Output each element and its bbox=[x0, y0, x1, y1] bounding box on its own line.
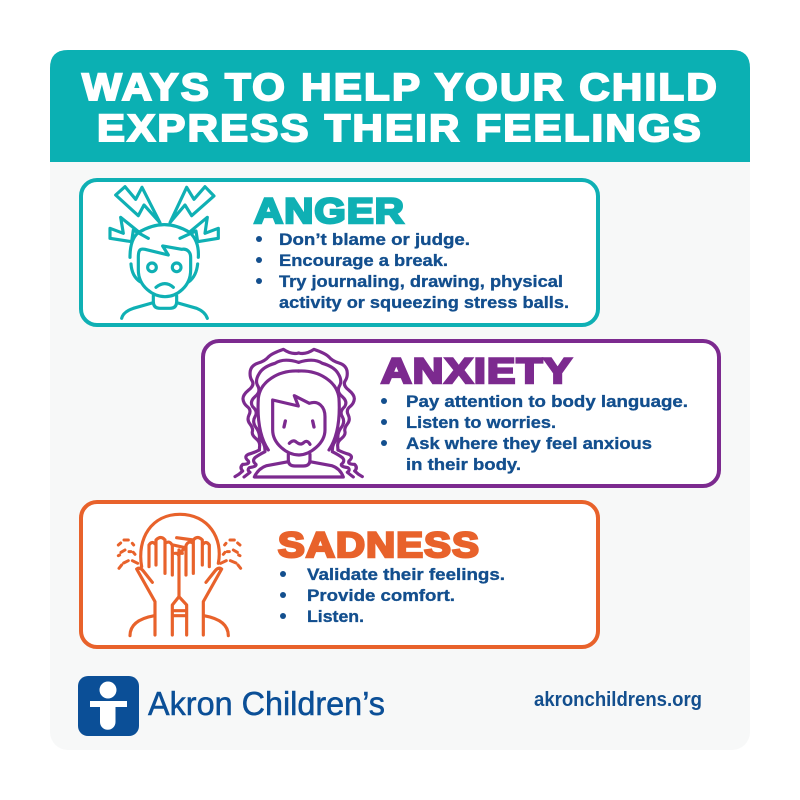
bullet list: anxiety: in their body. bbox=[406, 455, 521, 474]
heading: sadness: SADNESS bbox=[278, 526, 480, 565]
icon: crying child covering face bbox=[118, 514, 241, 636]
bullet list: anger: Don’t blame or judge. bbox=[279, 230, 470, 249]
icon: logo mark bbox=[78, 676, 139, 736]
logo: Akron Children's bbox=[78, 676, 385, 736]
panel: anxiety bbox=[203, 341, 719, 486]
panel: sadness bbox=[81, 502, 598, 647]
title banner bbox=[50, 50, 750, 162]
bullet list: sadness: Validate their feelings. bbox=[307, 565, 505, 584]
bullet list: anxiety: Ask where they feel anxious bbox=[406, 434, 652, 453]
icon: anxious child with wavy hair bbox=[235, 349, 362, 477]
bullet list: sadness: Provide comfort. bbox=[307, 586, 455, 605]
hair: left half bbox=[235, 349, 299, 477]
bullet list: anxiety: Listen to worries. bbox=[406, 413, 556, 432]
title line 2: EXPRESS THEIR FEELINGS bbox=[97, 108, 703, 150]
logo wordmark: Akron Children’s bbox=[148, 685, 385, 722]
bullet list: anger: Try journaling, drawing, physical bbox=[279, 272, 563, 291]
panel: anger bbox=[81, 180, 598, 325]
bullet list: anger: activity or squeezing stress balls. bbox=[279, 293, 569, 312]
title line 1: WAYS TO HELP YOUR CHILD bbox=[82, 67, 719, 109]
bullet list: anger: Encourage a break. bbox=[279, 251, 448, 270]
bullet list: anger bbox=[256, 230, 569, 312]
website url: akronchildrens.org bbox=[534, 689, 702, 711]
card background bbox=[50, 50, 750, 750]
heading: anger: ANGER bbox=[254, 192, 405, 231]
heading: anxiety: ANXIETY bbox=[381, 352, 573, 391]
hair: right half bbox=[299, 349, 362, 477]
bullet list: sadness: Listen. bbox=[307, 607, 364, 626]
bullet list: anxiety bbox=[381, 392, 688, 474]
bullet list: sadness bbox=[280, 565, 505, 626]
bullet list: anxiety: Pay attention to body language. bbox=[406, 392, 688, 411]
icon: angry child with lightning bbox=[110, 187, 218, 318]
